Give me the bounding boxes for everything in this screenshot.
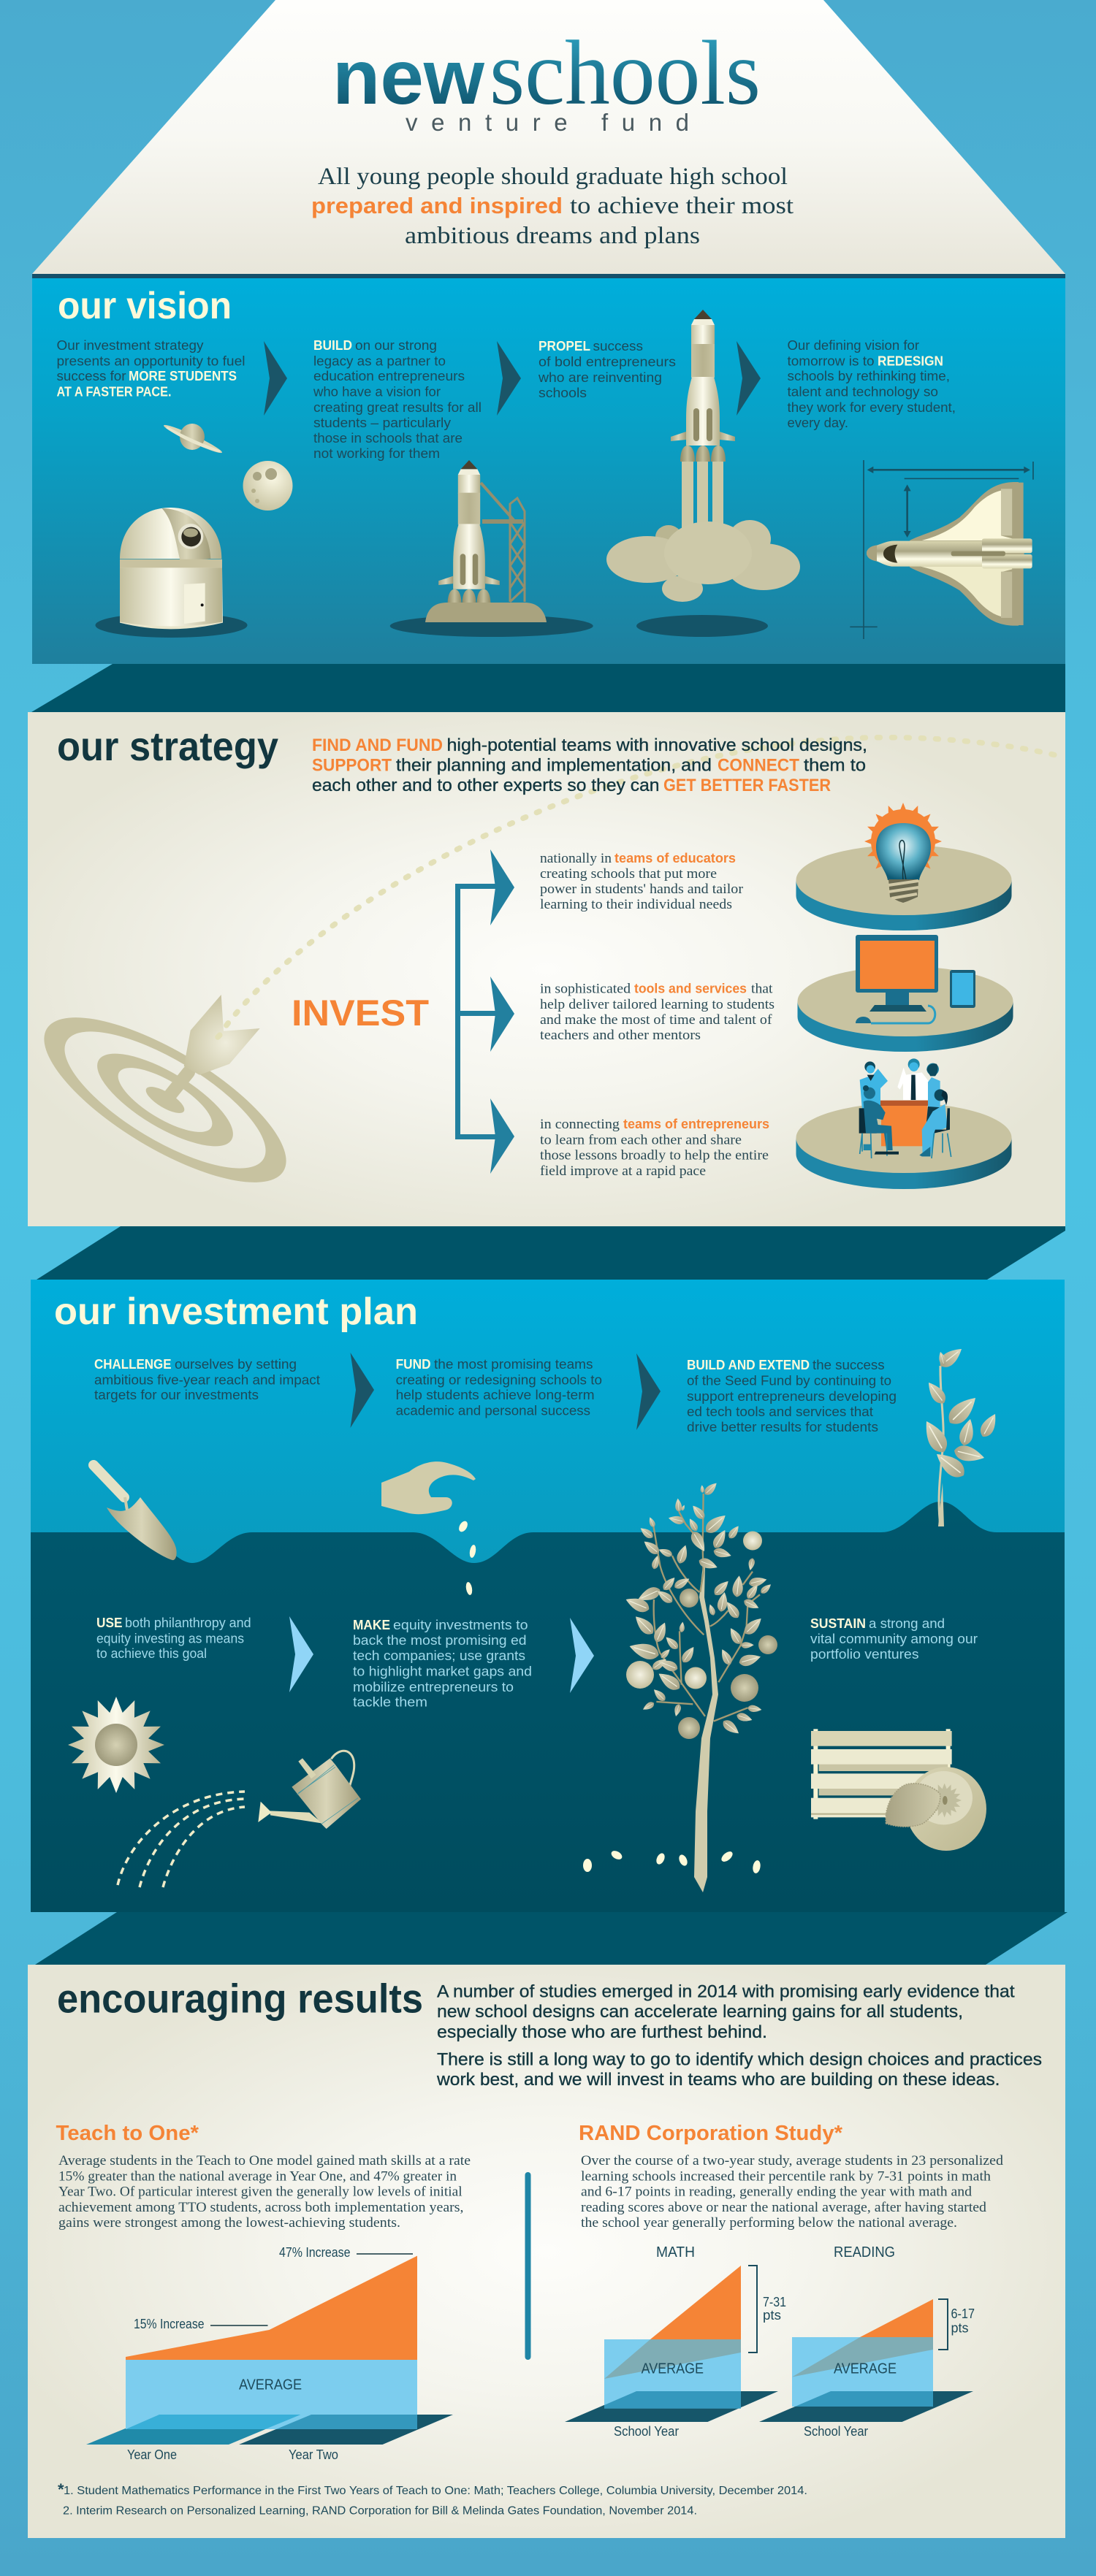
text: make: to highlight market gaps and	[353, 1664, 532, 1678]
text: build: students – particularly	[313, 416, 451, 430]
icon: shadow	[95, 613, 247, 638]
mission statement	[311, 164, 794, 249]
icon: trowel	[94, 1465, 177, 1560]
text: build and extend: support entrepreneurs developing	[687, 1389, 897, 1404]
chart: rand reading: 6-17	[951, 2306, 975, 2321]
heading: encouraging results: encouraging results	[57, 1976, 423, 2022]
text: fund: creating or redesigning schools to	[396, 1372, 602, 1387]
text: make: equity investments to	[393, 1618, 528, 1632]
text: defining vision: schools by rethinking time,	[788, 369, 950, 383]
label: invest: INVEST	[292, 993, 429, 1033]
text: strategy summary: each other and to other experts so they can	[312, 776, 659, 795]
text: fund: academic and personal success	[396, 1404, 590, 1418]
text: use: both philanthropy and	[125, 1616, 251, 1630]
footnotes	[58, 2480, 807, 2517]
arrow	[737, 341, 761, 416]
chart: rand math: pts	[763, 2308, 781, 2323]
text: propel: schools	[539, 386, 587, 400]
text: sustain: portfolio ventures	[810, 1647, 919, 1662]
text: build and extend	[687, 1358, 897, 1434]
chart: rand reading: School Year	[804, 2424, 868, 2439]
text: challenge: targets for our investments	[94, 1388, 259, 1402]
text: build and extend: ed tech tools and services that	[687, 1404, 873, 1419]
text: tools and services	[540, 982, 775, 1043]
text: make	[353, 1618, 532, 1710]
text: use: equity investing as means	[96, 1632, 244, 1646]
text: build: creating great results for all	[313, 400, 482, 415]
divider	[525, 2172, 530, 2360]
text: strategy summary	[312, 735, 867, 795]
arrow	[570, 1618, 594, 1693]
text: strategy summary: SUPPORT	[312, 755, 392, 776]
text: investment strategy: presents an opportunity to fuel	[57, 353, 246, 368]
text: propel: of bold entrepreneurs	[539, 355, 676, 370]
text: sustain	[810, 1616, 978, 1662]
text: propel	[538, 339, 676, 400]
band: shelf under plan	[35, 1912, 1068, 1965]
text: make: back the most promising ed	[353, 1633, 527, 1648]
icon: space shuttle blueprint	[850, 460, 1033, 639]
text: results summary: new school designs can accelerate learning gains for all students,	[437, 2002, 963, 2022]
text: make: MAKE	[353, 1618, 390, 1632]
text: strategy summary: CONNECT	[718, 755, 799, 776]
disk with computer	[798, 935, 1013, 1052]
text: build: on our strong	[355, 338, 437, 353]
text: strategy summary: high-potential teams with innovative school designs,	[447, 735, 867, 755]
chart: teach to one: AVERAGE	[239, 2377, 302, 2393]
text: build and extend: of the Seed Fund by continuing to	[687, 1374, 891, 1388]
text: rand study: reading scores above or near the national average, after having started	[581, 2200, 987, 2215]
text: rand study: and 6-17 points in reading, generally ending the year with math and	[581, 2185, 973, 2200]
text: rand study: the school year generally performing below the national average.	[581, 2215, 957, 2231]
icon: rocket on launch pad	[390, 460, 593, 637]
mission statement: prepared and inspired	[311, 193, 563, 218]
text: teams of entrepreneurs: those lessons broadly to help the entire	[540, 1147, 769, 1163]
text: use	[96, 1616, 251, 1661]
icon: tree	[583, 1480, 777, 1892]
chart: rand math: 7-31	[763, 2295, 786, 2309]
text: investment strategy: AT A FASTER PACE.	[57, 385, 171, 400]
text: teams of entrepreneurs: to learn from each other and share	[540, 1132, 742, 1148]
text: challenge	[94, 1357, 320, 1402]
icon: bench and apple	[811, 1729, 986, 1851]
text: results summary	[436, 1982, 1042, 2090]
icon: watering can	[118, 1751, 361, 1887]
disk with light bulb	[796, 803, 1011, 930]
text: make: tackle them	[353, 1695, 427, 1710]
text: challenge: CHALLENGE	[94, 1357, 171, 1372]
icon: hand dropping seeds	[381, 1461, 477, 1596]
text: build: who have a vision for	[313, 385, 441, 400]
chart: rand math: MATH	[656, 2244, 695, 2260]
text: build: BUILD	[313, 338, 352, 353]
logo: venture fund	[406, 109, 689, 136]
text: build: those in schools that are	[313, 431, 463, 446]
text: fund	[396, 1357, 602, 1418]
chart: teach to one	[86, 2245, 453, 2462]
icon: sun	[68, 1697, 164, 1793]
logo: schools	[490, 23, 761, 124]
text: challenge: ambitious five-year reach and impact	[94, 1372, 320, 1387]
text: rand study	[581, 2153, 1004, 2231]
text: strategy summary: GET BETTER FASTER	[663, 776, 831, 795]
arrow	[289, 1616, 313, 1692]
mission statement: ambitious dreams and plans	[405, 223, 700, 249]
mission statement: All young people should graduate high school	[318, 164, 788, 190]
text: propel: PROPEL	[539, 339, 590, 353]
text: teams of educators: learning to their individual needs	[540, 897, 732, 912]
text: tools and services: tools and services	[634, 982, 747, 996]
text: teams of educators: nationally in	[540, 851, 612, 866]
text: defining vision: they work for every student,	[788, 400, 956, 415]
text: strategy summary: their planning and implementation, and	[396, 755, 712, 776]
text: strategy summary: FIND AND FUND	[312, 735, 443, 755]
text: use: USE	[96, 1616, 123, 1630]
heading: rand corporation study: RAND Corporation Study*	[579, 2122, 843, 2145]
text: fund: the most promising teams	[434, 1357, 593, 1372]
text: tools and services: teachers and other mentors	[540, 1028, 701, 1043]
text: teams of entrepreneurs: field improve at a rapid pace	[540, 1163, 706, 1179]
footnotes: 2. Interim Research on Personalized Learning, RAND Corporation for Bill & Melinda Gates Foundation, November 2014.	[63, 2505, 697, 2517]
text: build: legacy as a partner to	[313, 353, 446, 368]
text: teams of educators: teams of educators	[614, 851, 736, 865]
text: results summary: especially those who are furthest behind.	[437, 2022, 767, 2042]
roof header	[32, 0, 1065, 278]
chart: teach to one: 47% Increase	[279, 2245, 351, 2260]
text: teach to one: 15% greater than the national average in Year One, and 47% greater in	[58, 2169, 457, 2185]
text: strategy summary: them to	[804, 755, 866, 776]
text: build: not working for them	[313, 446, 440, 461]
text: build	[313, 338, 482, 461]
arrow	[351, 1353, 374, 1428]
chart: rand math: School Year	[614, 2424, 679, 2439]
panel: encouraging results	[28, 1965, 1065, 2538]
footnotes: 1. Student Mathematics Performance in the First Two Years of Teach to One: Math; Teachers College, Columbia University, December 2014.	[64, 2485, 807, 2497]
logo: new	[332, 34, 485, 121]
text: teach to one: achievement among TTO students, across both implementation years,	[58, 2200, 463, 2215]
text: sustain: a strong and	[869, 1616, 945, 1631]
text: build: education entrepreneurs	[313, 369, 465, 383]
text: make: mobilize entrepreneurs to	[353, 1680, 514, 1694]
text: build and extend: drive better results for students	[687, 1420, 878, 1434]
text: results summary: There is still a long way to go to identify which design choices and practices	[437, 2050, 1042, 2070]
text: challenge: ourselves by setting	[175, 1357, 297, 1372]
text: tools and services: help deliver tailored learning to students	[540, 997, 775, 1012]
text: teams of entrepreneurs: teams of entrepreneurs	[623, 1117, 769, 1131]
panel: our vision	[32, 278, 1065, 664]
arrow	[636, 1353, 661, 1430]
text: build and extend: BUILD AND EXTEND	[687, 1358, 810, 1372]
text: teach to one: Average students in the Teach to One model gained math skills at a rate	[58, 2153, 471, 2168]
panel: our investment plan	[31, 1280, 1065, 1912]
text: teams of entrepreneurs	[540, 1117, 769, 1179]
icon: sapling	[919, 1344, 1000, 1526]
text: defining vision: talent and technology so	[788, 385, 938, 400]
text: teams of educators	[540, 851, 744, 912]
icon: target with arrow	[22, 987, 308, 1212]
heading: our vision: our vision	[58, 285, 232, 327]
heading: our investment plan: our investment plan	[54, 1291, 418, 1333]
chart: rand reading	[759, 2244, 975, 2439]
text: tools and services: and make the most of time and talent of	[540, 1012, 772, 1028]
text: results summary: work best, and we will invest in teams who are building on these ideas.	[436, 2070, 1000, 2090]
logo	[332, 23, 761, 136]
bracket with arrows	[455, 849, 514, 1174]
text: investment strategy: MORE STUDENTS	[129, 369, 237, 383]
text: teach to one: gains were strongest among the lowest-achieving students.	[58, 2215, 400, 2231]
heading: teach to one: Teach to One*	[56, 2122, 199, 2145]
band: shelf under vision	[31, 664, 1065, 712]
text: tools and services: that	[751, 982, 773, 996]
text: results summary: A number of studies emerged in 2014 with promising early evidence that	[437, 1982, 1015, 2002]
text: investment strategy: success for	[57, 369, 126, 383]
text: teach to one: Year Two. Of particular interest given the generally low levels of initial	[58, 2185, 463, 2200]
text: defining vision: tomorrow is to	[788, 353, 874, 368]
text: defining vision	[788, 338, 956, 430]
panel: our strategy	[22, 712, 1065, 1226]
icon: saturn	[162, 422, 224, 456]
icon: observatory dome	[120, 508, 223, 629]
text: use: to achieve this goal	[96, 1646, 207, 1661]
mission statement: to achieve their most	[570, 193, 794, 219]
text: defining vision: Our defining vision for	[788, 338, 919, 353]
chart: teach to one: 15% Increase	[134, 2317, 205, 2331]
text: investment strategy: Our investment strategy	[57, 338, 203, 353]
icon: moon	[243, 461, 292, 511]
band: shelf under strategy	[37, 1226, 1065, 1280]
text: build and extend: the success	[813, 1358, 885, 1372]
chart: rand reading: READING	[834, 2244, 895, 2260]
text: investment strategy	[57, 338, 246, 400]
text: sustain: SUSTAIN	[810, 1616, 866, 1631]
dotted arc	[218, 738, 1065, 1037]
text: teams of educators: power in students' hands and tailor	[540, 882, 744, 897]
text: propel: who are reinventing	[538, 370, 662, 385]
text: teach to one	[58, 2153, 471, 2231]
chart: rand math	[565, 2244, 786, 2439]
text: propel: success	[593, 339, 643, 353]
text: rand study: learning schools increased their percentile rank by 7-31 points in math	[581, 2169, 992, 2185]
disk with team of people	[796, 1058, 1011, 1189]
text: fund: FUND	[396, 1357, 431, 1372]
text: tools and services: in sophisticated	[540, 982, 631, 996]
text: teams of entrepreneurs: in connecting	[540, 1117, 620, 1132]
text: make: tech companies; use grants	[353, 1648, 525, 1663]
heading: our strategy: our strategy	[57, 723, 278, 769]
icon: rocket launching with clouds	[606, 310, 800, 637]
text: sustain: vital community among our	[810, 1632, 978, 1646]
arrow	[264, 341, 287, 416]
footnotes: *	[58, 2480, 64, 2499]
text: rand study: Over the course of a two-year study, average students in 23 personalized	[581, 2153, 1004, 2168]
text: fund: help students achieve long-term	[396, 1388, 595, 1402]
chart: teach to one: Year One	[127, 2447, 177, 2462]
text: defining vision: REDESIGN	[878, 353, 943, 368]
chart: rand reading: pts	[951, 2321, 969, 2336]
chart: teach to one: Year Two	[289, 2447, 338, 2462]
text: defining vision: every day.	[788, 416, 848, 430]
text: teams of educators: creating schools that put more	[540, 866, 717, 882]
arrow	[497, 341, 521, 416]
chart: rand math: AVERAGE	[642, 2361, 704, 2377]
chart: rand reading: AVERAGE	[834, 2361, 897, 2377]
